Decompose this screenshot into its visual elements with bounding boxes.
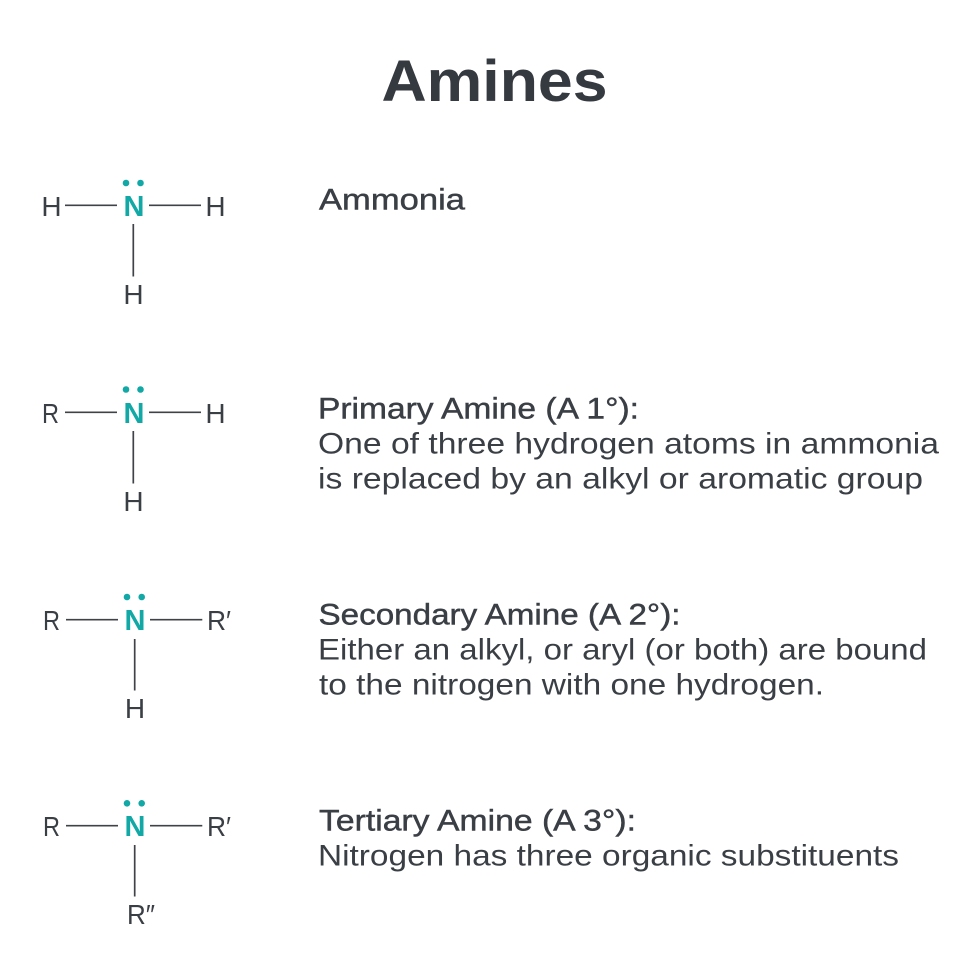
text: primary amine: One of three hydrogen atoms in ammonia xyxy=(318,428,939,460)
structure: tertiary amine: R″ xyxy=(127,899,155,930)
text: primary amine: Primary Amine (A 1°): xyxy=(318,392,639,426)
structure: primary amine: R xyxy=(42,398,59,429)
structure: tertiary amine xyxy=(43,800,231,930)
structure: secondary amine: R xyxy=(43,605,60,636)
text: secondary amine: Secondary Amine (A 2°): xyxy=(318,598,680,632)
structure: secondary amine: R′ xyxy=(207,605,231,636)
structure: ammonia xyxy=(41,180,226,310)
text: primary amine: is replaced by an alkyl or aromatic group xyxy=(318,462,923,496)
structure: ammonia: N xyxy=(124,191,144,223)
structure: primary amine: N xyxy=(124,398,144,430)
text: tertiary amine: Tertiary Amine (A 3°): xyxy=(319,804,636,838)
structure: ammonia: H xyxy=(123,279,144,310)
text: ammonia: Ammonia xyxy=(319,184,465,216)
title: Amines xyxy=(382,49,608,114)
structure: tertiary amine: N xyxy=(125,811,145,843)
text: secondary amine xyxy=(318,598,927,702)
structure: primary amine: H xyxy=(205,398,226,429)
structure: secondary amine: H xyxy=(125,693,145,724)
text: tertiary amine: Nitrogen has three organic substituents xyxy=(318,840,899,872)
structure: secondary amine xyxy=(43,594,231,724)
structure: secondary amine: N xyxy=(125,605,145,637)
text: primary amine xyxy=(318,392,939,496)
structure: primary amine: H xyxy=(123,486,144,517)
structure: primary amine xyxy=(42,386,226,517)
text: secondary amine: to the nitrogen with one hydrogen. xyxy=(319,668,824,702)
structure: ammonia: H xyxy=(41,191,62,222)
text: tertiary amine xyxy=(318,804,899,872)
structure: ammonia: H xyxy=(205,191,226,222)
text: secondary amine: Either an alkyl, or aryl (or both) are bound xyxy=(318,634,927,666)
structure: tertiary amine: R′ xyxy=(207,811,231,842)
structure: tertiary amine: R xyxy=(43,811,60,842)
